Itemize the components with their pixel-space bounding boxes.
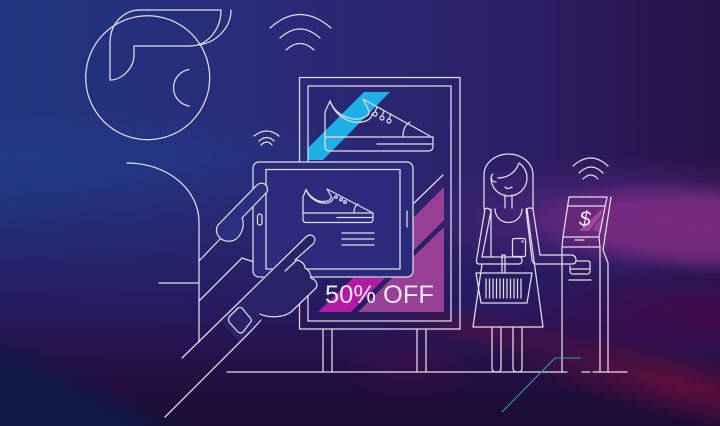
poster frame: [300, 78, 460, 372]
poster sneaker: [325, 99, 433, 151]
face: [491, 163, 527, 196]
tablet: [253, 162, 413, 277]
hair: [484, 154, 533, 209]
phone: [512, 238, 526, 256]
left arm: [476, 208, 522, 264]
card reader: [570, 261, 590, 274]
tablet buttons: [258, 211, 407, 227]
neck: [505, 195, 512, 208]
poster blue stripe: [308, 92, 390, 160]
dollar sign: $: [578, 208, 591, 231]
tablet sneaker: [303, 189, 373, 222]
hair outer arc: [198, 10, 231, 45]
ground line: [227, 371, 627, 373]
right arm: [526, 208, 576, 264]
person shoulder and arm: [127, 163, 199, 342]
back hand holding tablet: [199, 238, 254, 301]
thumb: [216, 183, 267, 241]
teal accent line: [502, 358, 581, 412]
legs: [492, 327, 501, 372]
discount text: 50% OFF: [325, 281, 434, 309]
payment kiosk: [562, 197, 611, 372]
poster display: [300, 78, 460, 372]
wifi signal: tablet: [254, 131, 279, 145]
woman shopper: [473, 154, 576, 372]
poster purple stripes: [412, 187, 444, 252]
illustration: person head: [86, 10, 231, 140]
kiosk screen stripe: [579, 208, 603, 231]
pointing hand: [165, 235, 317, 417]
wifi signal: top: [270, 14, 331, 50]
wifi signal: kiosk: [573, 158, 608, 179]
ear: [174, 70, 189, 106]
ring: [228, 308, 251, 333]
hair: [110, 10, 221, 80]
dress: [473, 209, 543, 327]
poster magenta stripe: [318, 278, 385, 312]
tablet text lines: [342, 233, 374, 245]
basket: [502, 255, 505, 273]
